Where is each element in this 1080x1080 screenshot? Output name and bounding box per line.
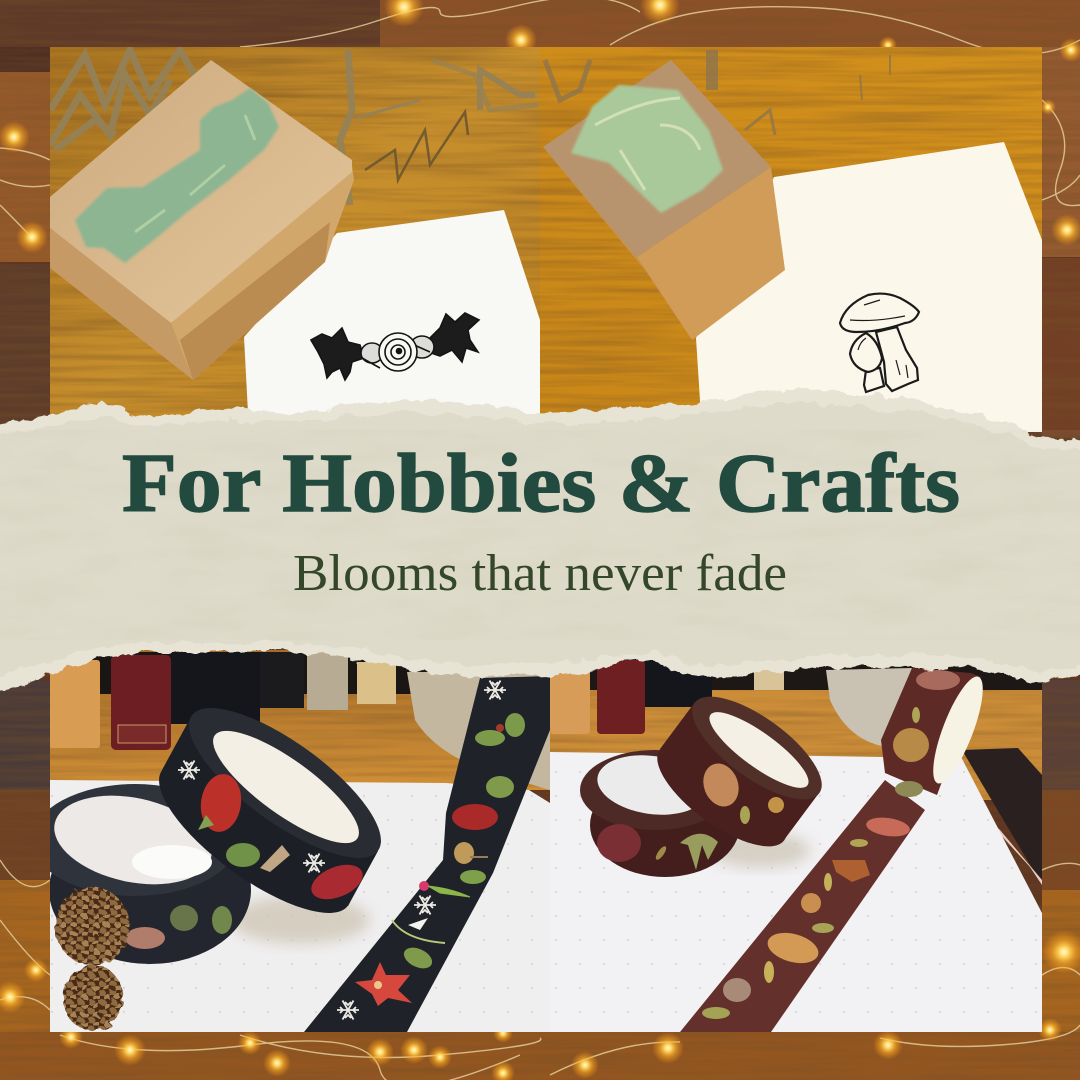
photo: maroon autumn washi tape bbox=[550, 650, 1042, 1032]
white dotted paper bbox=[550, 752, 1042, 1032]
white dotted paper bbox=[50, 780, 550, 1032]
photo: floral rubber stamp bbox=[50, 47, 540, 432]
torn paper banner bbox=[0, 388, 1080, 695]
tape strip bbox=[304, 676, 550, 1032]
green mushroom stamp bbox=[571, 85, 723, 213]
upper tape roll bbox=[657, 696, 822, 846]
blank paper with floral print bbox=[244, 210, 540, 432]
books and bowl on shelf bbox=[49, 652, 550, 790]
green floral stamp bbox=[75, 88, 279, 263]
tape strip bbox=[680, 780, 925, 1032]
title: For Hobbies & Crafts bbox=[122, 437, 960, 530]
upper tape roll bbox=[159, 708, 381, 913]
photo: mushroom rubber stamp bbox=[540, 47, 1042, 432]
hessian wood stamp block bbox=[543, 60, 785, 340]
lower roll motifs bbox=[125, 905, 232, 949]
tape shadow bbox=[230, 896, 370, 944]
photo: black floral washi tape bbox=[32, 650, 550, 1032]
lower tape roll bbox=[32, 782, 251, 964]
shredded kraft paper bbox=[50, 50, 538, 205]
wood stamp block bbox=[50, 60, 354, 380]
subtitle: Blooms that never fade bbox=[293, 545, 787, 602]
lower tape roll bbox=[580, 749, 740, 877]
upper roll motifs bbox=[178, 760, 368, 906]
tape shadow bbox=[710, 832, 810, 868]
pine cones bbox=[55, 887, 129, 1031]
standing tape roll bbox=[881, 668, 992, 797]
blank paper with mushroom print bbox=[696, 142, 1042, 432]
books and bowl on shelf bbox=[550, 652, 1042, 885]
